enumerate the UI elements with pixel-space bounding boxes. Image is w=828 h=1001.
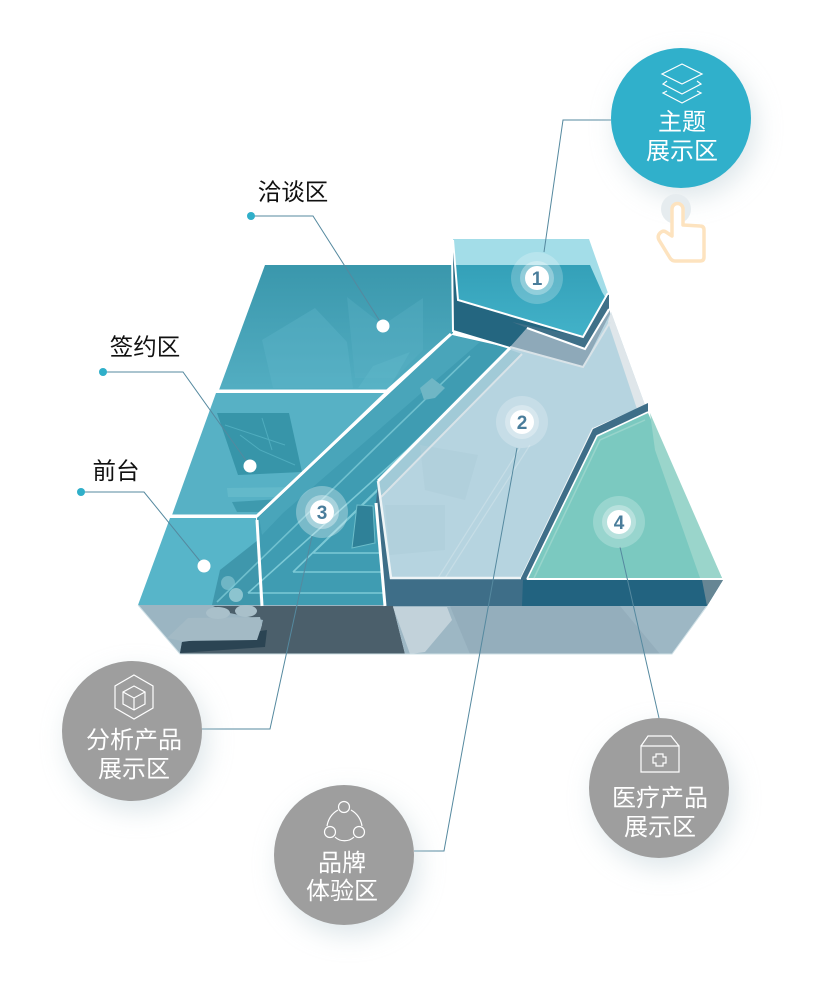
callout: 主题展示区: 主题: [658, 109, 706, 136]
marker 3: 3: [317, 503, 327, 524]
area label: 洽谈区: [247, 179, 390, 332]
callout: 分析产品展示区: 分析产品: [86, 727, 182, 754]
area label: 前台: 前台: [92, 458, 140, 484]
zone 2-4 channel: [521, 403, 648, 606]
icon: layers: [662, 64, 702, 103]
floor plan 3D block: [138, 239, 723, 654]
callout: 主题展示区: 展示区: [646, 138, 718, 165]
area label: 签约区: 签约区: [110, 334, 180, 360]
marker 1: [511, 252, 563, 304]
callout: 品牌体验区: 体验区: [306, 878, 378, 905]
callout: 医疗产品展示区: [589, 718, 734, 868]
front wall right: [393, 605, 707, 654]
leader lines: [81, 120, 659, 851]
icon: three linked circles: [324, 802, 364, 841]
white partition lines: [138, 240, 722, 654]
zone 2: grey band: [510, 310, 610, 367]
icon: pointing hand: [658, 194, 704, 261]
marker 4: [593, 496, 645, 548]
zone: meeting area: [219, 265, 453, 390]
icon: medical box: [641, 736, 679, 772]
callout: 品牌体验区: 品牌: [318, 850, 366, 877]
callout: 医疗产品展示区: 医疗产品: [612, 785, 708, 812]
callout: 分析产品展示区: [62, 661, 207, 811]
area label: 签约区: [99, 334, 256, 472]
zone 1: theme area wall: [453, 250, 609, 348]
zone 3: corridor: [217, 335, 510, 605]
zone 4: medical top: [527, 413, 722, 578]
callout: 医疗产品展示区: 展示区: [624, 814, 696, 841]
callout: 主题展示区: [611, 48, 756, 198]
zone: signing area: [172, 393, 384, 515]
marker 4: 4: [614, 513, 625, 534]
zone: reception: [138, 518, 260, 605]
zone 2: brand area top: [378, 312, 645, 578]
zone 1: theme area top: [453, 239, 608, 337]
area label: 前台: [77, 458, 210, 572]
marker 1: 1: [532, 269, 543, 290]
front wall left: [138, 605, 405, 654]
zone 4: medical side: [522, 580, 723, 606]
marker 2: 2: [517, 413, 527, 434]
callout: 分析产品展示区: 展示区: [98, 756, 170, 783]
zone 2: brand area wall: [376, 483, 524, 606]
icon: hexagon cube: [115, 675, 153, 719]
callout: 品牌体验区: [274, 785, 419, 935]
marker 3: [296, 486, 348, 538]
area label: 洽谈区: 洽谈区: [258, 179, 328, 205]
marker 2: [496, 396, 548, 448]
